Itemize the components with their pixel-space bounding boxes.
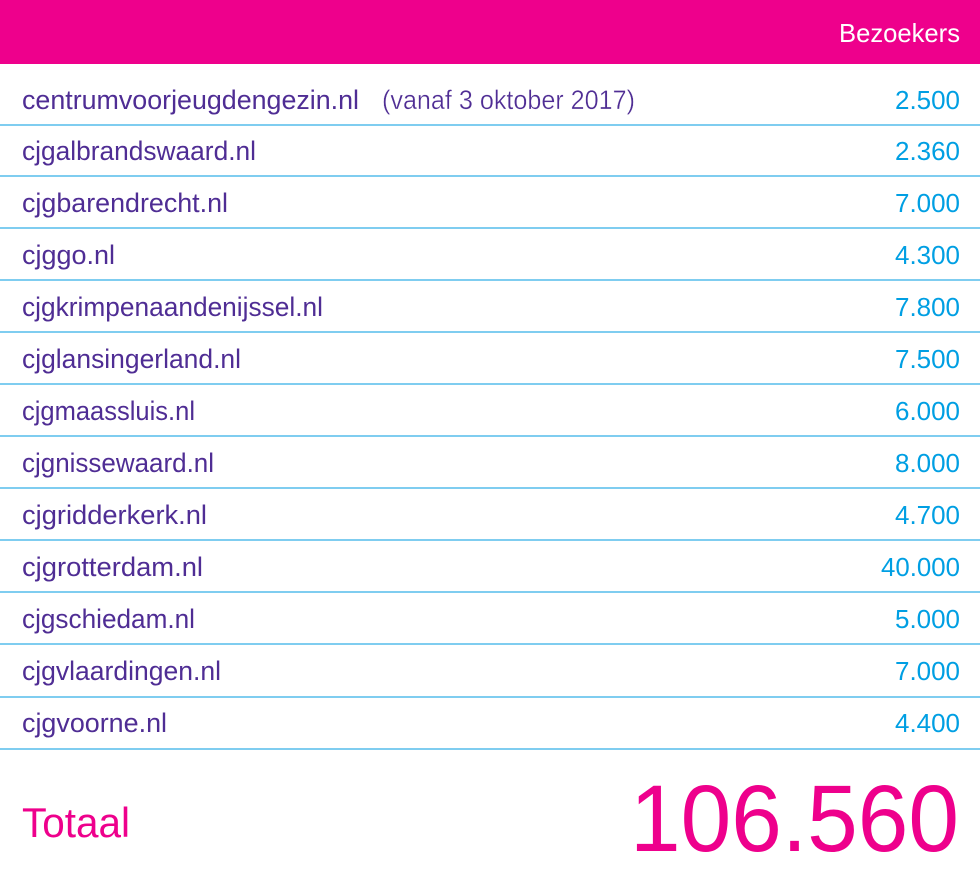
row: centrumvoorjeugdengezin.nl	[22, 85, 960, 115]
row: cjgalbrandswaard.nl: cjgalbrandswaard.nl	[22, 136, 256, 166]
row: cjgridderkerk.nl: 4.700	[895, 500, 960, 530]
row: cjgkrimpenaandenijssel.nl: cjgkrimpenaandenijssel.nl	[22, 292, 323, 322]
row: centrumvoorjeugdengezin.nl: (vanaf 3 oktober 2017)	[382, 85, 635, 115]
row: cjgbarendrecht.nl: 7.000	[895, 188, 960, 218]
header bar	[0, 0, 980, 64]
row: cjggo.nl: 4.300	[895, 240, 960, 270]
row: cjgvoorne.nl: 4.400	[895, 708, 960, 738]
row: cjgrotterdam.nl: cjgrotterdam.nl	[22, 552, 203, 582]
row: cjgnissewaard.nl: 8.000	[895, 448, 960, 478]
row: cjgnissewaard.nl: cjgnissewaard.nl	[22, 448, 214, 478]
row: cjgkrimpenaandenijssel.nl: 7.800	[895, 292, 960, 322]
row: cjgvoorne.nl	[22, 708, 960, 738]
row: cjgmaassluis.nl: 6.000	[895, 396, 960, 426]
row: cjgalbrandswaard.nl	[22, 136, 960, 166]
row: cjgmaassluis.nl: cjgmaassluis.nl	[22, 396, 195, 426]
row: cjgbarendrecht.nl	[22, 188, 960, 218]
row: cjgvlaardingen.nl	[22, 656, 960, 686]
row: cjgrotterdam.nl	[22, 552, 960, 582]
row: cjgridderkerk.nl: cjgridderkerk.nl	[22, 500, 207, 530]
row: centrumvoorjeugdengezin.nl: 2.500	[895, 85, 960, 115]
row: cjgvlaardingen.nl: cjgvlaardingen.nl	[22, 656, 221, 686]
row: cjggo.nl: cjggo.nl	[22, 240, 115, 270]
header bar: Bezoekers	[839, 18, 960, 48]
row: cjglansingerland.nl: cjglansingerland.nl	[22, 344, 241, 374]
row: cjglansingerland.nl: 7.500	[895, 344, 960, 374]
row: cjgmaassluis.nl	[22, 396, 960, 426]
total row: Totaal	[22, 799, 130, 846]
total row	[22, 766, 959, 872]
row: cjgvlaardingen.nl: 7.000	[895, 656, 960, 686]
row: cjggo.nl	[22, 240, 960, 270]
row: cjgkrimpenaandenijssel.nl	[22, 292, 960, 322]
row: cjgvoorne.nl: cjgvoorne.nl	[22, 708, 167, 738]
total row: 106.560	[630, 766, 959, 872]
row: cjgschiedam.nl	[22, 604, 960, 634]
row: centrumvoorjeugdengezin.nl: centrumvoorjeugdengezin.nl	[22, 85, 359, 115]
row: cjgbarendrecht.nl: cjgbarendrecht.nl	[22, 188, 228, 218]
row: cjgnissewaard.nl	[22, 448, 960, 478]
row: cjgschiedam.nl: 5.000	[895, 604, 960, 634]
row: cjgrotterdam.nl: 40.000	[881, 552, 960, 582]
row: cjgridderkerk.nl	[22, 500, 960, 530]
row: cjglansingerland.nl	[22, 344, 960, 374]
row: cjgalbrandswaard.nl: 2.360	[895, 136, 960, 166]
row: cjgschiedam.nl: cjgschiedam.nl	[22, 604, 195, 634]
